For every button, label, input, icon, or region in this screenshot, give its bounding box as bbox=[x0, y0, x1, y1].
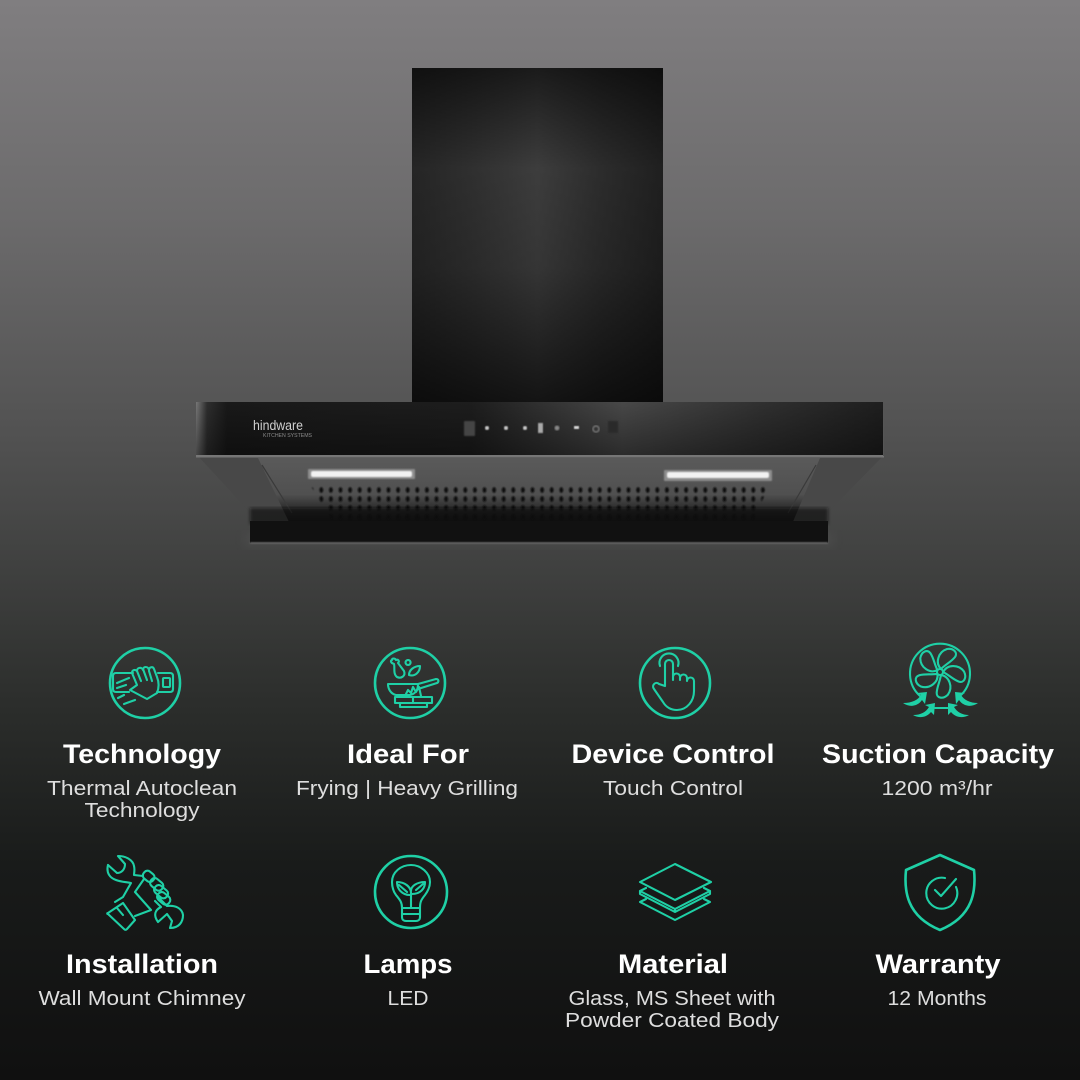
icon: touch finger bbox=[640, 648, 710, 718]
front lip bbox=[250, 521, 828, 544]
soft halo below hood bbox=[244, 532, 834, 548]
description: Technology bbox=[84, 800, 200, 822]
brand logo: hindware bbox=[253, 418, 303, 433]
chimney duct bbox=[412, 68, 663, 402]
description: Frying | Heavy Grilling bbox=[296, 778, 518, 800]
left lamp bbox=[308, 469, 415, 479]
touch controls bbox=[464, 421, 618, 436]
grease filter mesh bbox=[311, 486, 769, 520]
feature: Installation bbox=[38, 856, 246, 1010]
feature: Lamps bbox=[364, 856, 452, 1010]
heading: Installation bbox=[66, 949, 218, 979]
right lamp bbox=[664, 470, 772, 481]
heading: Warranty bbox=[876, 949, 1000, 979]
description: Wall Mount Chimney bbox=[38, 988, 246, 1010]
description bbox=[47, 778, 237, 822]
icon: shield check bbox=[905, 855, 975, 930]
heading: Suction Capacity bbox=[822, 739, 1054, 769]
heading: Ideal For bbox=[347, 739, 470, 769]
brand logo: KITCHEN SYSTEMS bbox=[263, 433, 313, 439]
icon: frying pan bbox=[375, 648, 445, 718]
icon: layers bbox=[640, 864, 711, 920]
feature: Warranty bbox=[876, 855, 1000, 1010]
feature: Device Control bbox=[572, 648, 774, 800]
heading: Technology bbox=[63, 739, 221, 769]
description: LED bbox=[388, 988, 428, 1010]
brand logo bbox=[253, 418, 313, 439]
feature: Ideal For bbox=[296, 648, 518, 800]
heading: Device Control bbox=[572, 739, 774, 769]
feature: Material bbox=[565, 864, 779, 1032]
heading: Lamps bbox=[364, 949, 452, 979]
icon: hand on filter bbox=[110, 648, 180, 718]
product: kitchen chimney bbox=[196, 68, 884, 548]
filter shadow bbox=[250, 508, 828, 524]
heading: Material bbox=[618, 949, 728, 979]
description: 1200 m³/hr bbox=[882, 778, 993, 800]
glass front panel bbox=[196, 402, 884, 458]
description bbox=[565, 988, 779, 1032]
description: Powder Coated Body bbox=[565, 1010, 779, 1032]
icon: fan with arrows bbox=[903, 644, 978, 717]
feature: Technology bbox=[47, 648, 237, 822]
icon: hand with wrench bbox=[107, 856, 183, 930]
description: Glass, MS Sheet with bbox=[568, 988, 776, 1010]
icon: eco light bulb bbox=[375, 856, 447, 928]
feature: Suction Capacity bbox=[822, 644, 1054, 800]
hood underside bbox=[198, 456, 883, 524]
description: 12 Months bbox=[888, 988, 986, 1010]
description: Thermal Autoclean bbox=[47, 778, 237, 800]
description: Touch Control bbox=[603, 778, 743, 800]
